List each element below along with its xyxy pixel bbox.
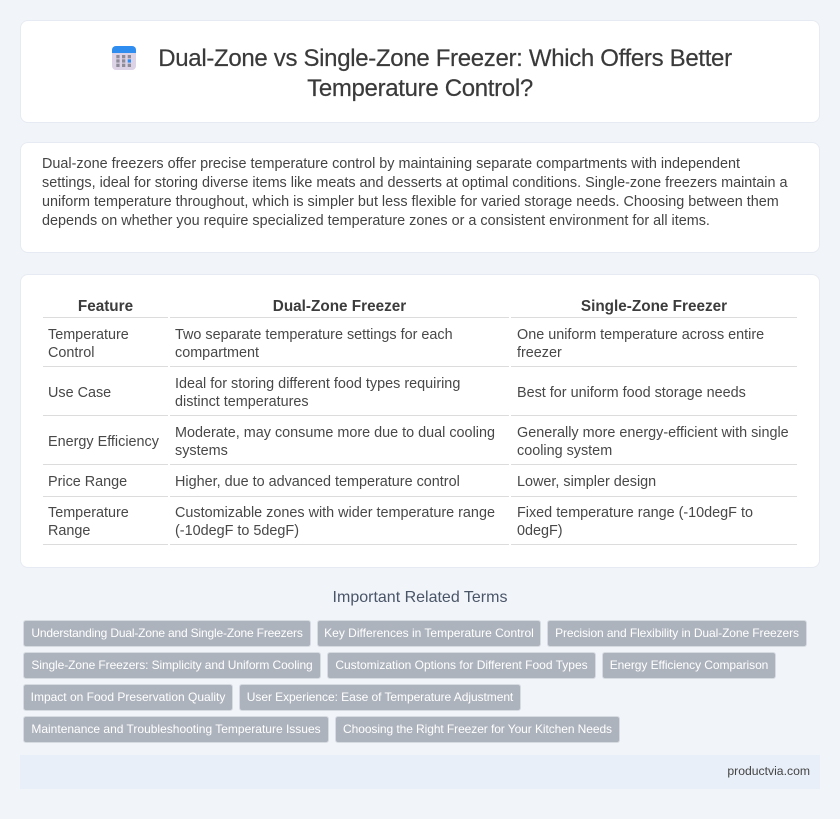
tag	[547, 620, 807, 647]
table row: use case: Use Case	[48, 385, 111, 401]
footer bar	[20, 755, 820, 789]
tag	[239, 684, 521, 711]
panel: introduction	[20, 142, 820, 253]
table row: price range: Higher, due to advanced temperature control	[175, 474, 460, 490]
text block: introduction: depends on whether you require specialized temperature zones or a consistent environment for all items.	[42, 213, 710, 229]
table row: use case: Ideal for storing different food types requiring	[175, 376, 460, 392]
tag: Customization Options for Different Food Types	[335, 658, 588, 672]
title: Temperature Control?	[307, 75, 533, 102]
tag	[327, 652, 596, 679]
table row: energy efficiency	[48, 425, 789, 459]
table row: temperature range: Range	[48, 523, 90, 539]
tag: Precision and Flexibility in Dual-Zone Freezers	[555, 626, 799, 640]
tag: User Experience: Ease of Temperature Adjustment	[247, 690, 513, 704]
tag	[317, 620, 541, 647]
table row: price range: Lower, simpler design	[517, 474, 656, 490]
tag: Choosing the Right Freezer for Your Kitchen Needs	[343, 722, 612, 736]
table row: energy efficiency: cooling system	[517, 443, 612, 459]
table: header row	[78, 298, 727, 315]
table row: temperature control: compartment	[175, 345, 259, 361]
table row: temperature range: Temperature	[48, 505, 129, 521]
tag: Maintenance and Troubleshooting Temperature Issues	[31, 722, 321, 736]
table row: temperature range: 0degF)	[517, 523, 563, 539]
tag	[23, 684, 233, 711]
table row: use case: Best for uniform food storage needs	[517, 385, 746, 401]
title: Dual-Zone vs Single-Zone Freezer: Which Offers Better	[158, 45, 732, 72]
table: header row: Feature	[78, 298, 133, 315]
table row: energy efficiency: Moderate, may consume more due to dual cooling	[175, 425, 495, 441]
table row: temperature range: (-10degF to 5degF)	[175, 523, 299, 539]
table row: temperature control: freezer	[517, 345, 562, 361]
table row: temperature control: One uniform temperature across entire	[517, 327, 764, 343]
tag: Energy Efficiency Comparison	[610, 658, 768, 672]
table row: temperature control	[48, 327, 764, 361]
table: header row: Dual-Zone Freezer	[273, 298, 406, 315]
table: header row: Single-Zone Freezer	[581, 298, 727, 315]
tag	[23, 652, 321, 679]
table row: energy efficiency: systems	[175, 443, 228, 459]
tag list: related terms	[23, 620, 807, 743]
table row: temperature control: Two separate temperature settings for each	[175, 327, 453, 343]
title	[158, 45, 732, 102]
tag	[602, 652, 776, 679]
tag: Understanding Dual-Zone and Single-Zone Freezers	[31, 626, 303, 640]
table row: energy efficiency: Generally more energy-efficient with single	[517, 425, 789, 441]
table row: energy efficiency: Energy Efficiency	[48, 434, 159, 450]
table row: use case: distinct temperatures	[175, 394, 309, 410]
tag	[335, 716, 620, 743]
table row: temperature control: Control	[48, 345, 94, 361]
table row: price range: Price Range	[48, 474, 127, 490]
panel: title card	[20, 20, 820, 123]
table row: price range	[48, 474, 656, 490]
tag: Key Differences in Temperature Control	[324, 626, 534, 640]
icon: calendar	[112, 46, 136, 70]
panel: comparison table	[20, 274, 820, 568]
footer text: source: productvia.com	[727, 764, 810, 778]
tag	[23, 716, 329, 743]
text block: introduction	[42, 156, 788, 229]
table row: temperature range	[48, 505, 753, 539]
heading: related terms: Important Related Terms	[333, 589, 507, 606]
tag: Single-Zone Freezers: Simplicity and Uniform Cooling	[31, 658, 313, 672]
text block: introduction: uniform temperature throughout, which is simpler but less flexible for varied storage needs. Choosing between them	[42, 194, 779, 210]
table row: temperature range: Fixed temperature range (-10degF to	[517, 505, 753, 521]
table row: use case	[48, 376, 746, 410]
tag: Impact on Food Preservation Quality	[31, 690, 225, 704]
tag	[23, 620, 311, 647]
table row: temperature range: Customizable zones with wider temperature range	[175, 505, 495, 521]
text block: introduction: Dual-zone freezers offer precise temperature control by maintaining separate compartments with independent	[42, 156, 740, 172]
text block: introduction: settings, ideal for storing diverse items like meats and desserts at optimal conditions. Single-zone freezers maintain a	[42, 175, 787, 191]
table row: temperature control: Temperature	[48, 327, 129, 343]
